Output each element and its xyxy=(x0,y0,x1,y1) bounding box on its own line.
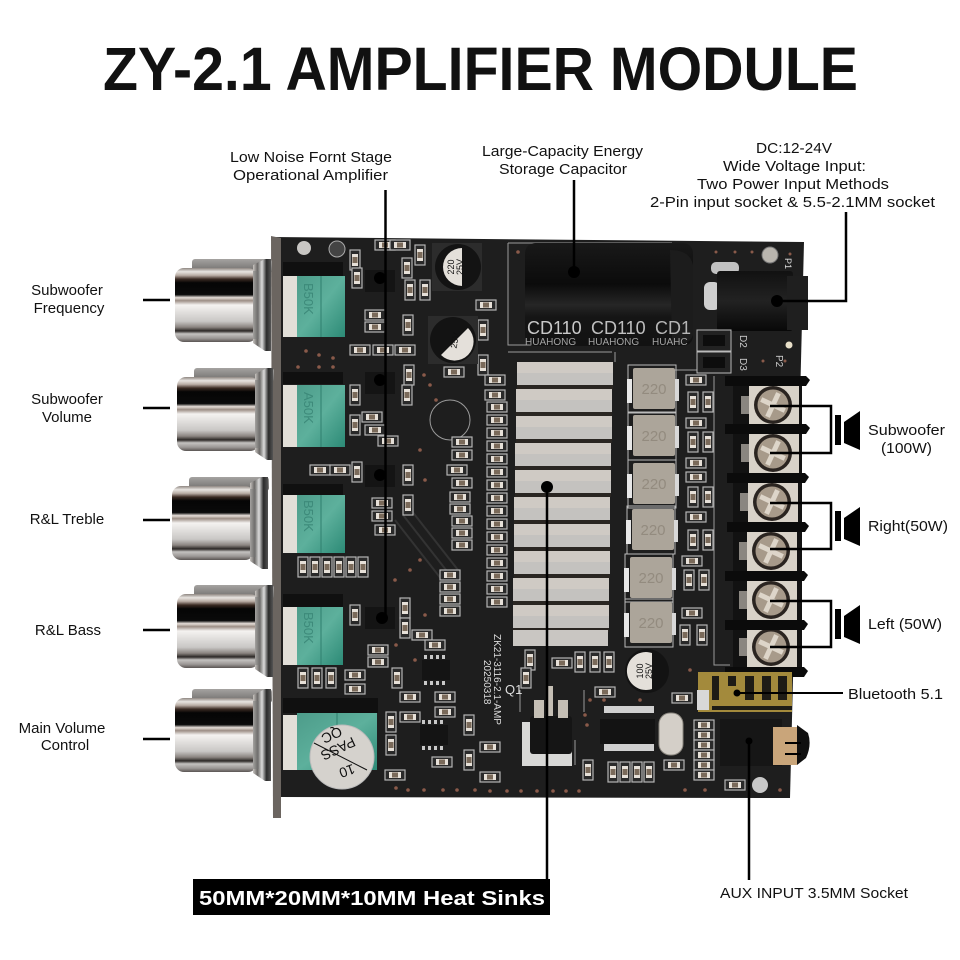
leader: op amp xyxy=(374,190,388,624)
leader: aux xyxy=(746,738,752,880)
diodes xyxy=(697,330,792,373)
pcb base xyxy=(272,237,804,798)
silkscreen outlines xyxy=(430,243,730,765)
label: subwoofer frequency: Frequency xyxy=(34,300,105,317)
smt electrolytic capacitors: 100 xyxy=(635,663,645,679)
label: bass: R&L Bass xyxy=(35,622,101,639)
leader: subwoofer frequency xyxy=(143,299,170,301)
smt electrolytic capacitors: 220 xyxy=(446,259,456,275)
label: treble: R&L Treble xyxy=(30,511,104,528)
aux 3.5mm jack xyxy=(720,719,810,766)
icon: speaker subwoofer xyxy=(835,411,860,450)
panel bracket xyxy=(271,236,281,818)
smt electrolytic capacitors xyxy=(428,243,669,693)
leader: heat sinks xyxy=(541,481,553,880)
board silkscreen text: ZK21-3116-2.1-AMP xyxy=(491,634,502,725)
panel: amplifier board xyxy=(172,236,810,818)
label: left 50w: Left (50W) xyxy=(868,616,942,633)
icon: speaker right xyxy=(835,507,860,546)
label: capacitor: Storage Capacitor xyxy=(499,161,627,178)
label: subwoofer volume: Subwoofer xyxy=(31,391,103,408)
diodes: D3 xyxy=(737,358,748,371)
label: capacitor: Large-Capacity Energy xyxy=(482,143,644,160)
label: op amp: Low Noise Fornt Stage xyxy=(230,149,392,166)
op-amp chips xyxy=(365,270,450,750)
large energy storage capacitor xyxy=(525,243,693,348)
leader: bluetooth xyxy=(734,690,843,696)
label: bluetooth: Bluetooth 5.1 xyxy=(848,686,943,703)
label: dc input: Two Power Input Methods xyxy=(697,176,889,193)
label: dc input: 2-Pin input socket & 5.5-2.1MM socket xyxy=(650,194,936,211)
mounting pads xyxy=(297,241,778,793)
label: op amp: Operational Amplifier xyxy=(233,167,388,184)
label: subwoofer 100w: (100W) xyxy=(881,440,932,457)
large energy storage capacitor: CD110 xyxy=(527,318,582,338)
smd components xyxy=(298,240,507,782)
knobs xyxy=(172,259,274,781)
qc pass sticker xyxy=(310,724,374,789)
large energy storage capacitor: HUAHONG xyxy=(525,337,576,348)
large energy storage capacitor: HUAHC xyxy=(652,337,688,348)
leader: subwoofer volume xyxy=(143,407,170,409)
bluetooth pcb antenna xyxy=(697,672,792,712)
smt electrolytic capacitors: 25V xyxy=(449,332,461,349)
potentiometers xyxy=(283,262,378,770)
smt electrolytic capacitors: 25V xyxy=(644,663,654,679)
large energy storage capacitor: CD110 xyxy=(591,318,646,338)
diodes: P2 xyxy=(773,355,784,368)
bracket: subwoofer xyxy=(770,406,831,453)
transistor, ic and crystal xyxy=(522,686,683,766)
qc pass sticker: 10 xyxy=(337,761,357,781)
panel: amplifier board: B50K xyxy=(301,612,316,644)
vias xyxy=(296,250,792,793)
label: dc input: Wide Voltage Input: xyxy=(723,158,866,175)
bracket: right xyxy=(770,503,831,549)
qc pass sticker: QC xyxy=(319,724,345,747)
dc power jack xyxy=(704,262,808,331)
label: main volume: Main Volume xyxy=(19,720,105,737)
bracket: left xyxy=(770,601,831,647)
label: subwoofer 100w: Subwoofer xyxy=(868,422,945,439)
board silkscreen text: 20250318 xyxy=(481,660,492,705)
title: ZY-2.1 AMPLIFIER MODULE xyxy=(103,35,858,103)
leader: main volume xyxy=(143,738,170,740)
qc pass sticker: PASS xyxy=(318,734,358,764)
leader: bass xyxy=(143,629,170,631)
board silkscreen text: P1 xyxy=(783,258,793,269)
screw terminal block xyxy=(725,376,810,677)
board silkscreen text xyxy=(481,258,793,725)
leader: treble xyxy=(143,519,170,521)
panel: amplifier board: B50K xyxy=(301,500,316,532)
panel: amplifier board: B50K xyxy=(301,283,316,315)
leader: capacitor xyxy=(568,180,580,278)
large energy storage capacitor: CD1 xyxy=(655,318,691,338)
smt electrolytic capacitors: 25V xyxy=(455,259,465,275)
icon: speaker left xyxy=(835,605,860,644)
panel: amplifier board: A50K xyxy=(301,392,316,424)
diagonal traces xyxy=(395,510,458,580)
label: right 50w: Right(50W) xyxy=(868,518,948,535)
diodes: D2 xyxy=(737,335,748,348)
board silkscreen text: Q1 xyxy=(505,682,522,697)
label: aux input: AUX INPUT 3.5MM Socket xyxy=(720,885,909,902)
label: dc input: DC:12-24V xyxy=(756,140,832,157)
label: subwoofer frequency: Subwoofer xyxy=(31,282,103,299)
leader: dc jack xyxy=(771,212,846,307)
inductors xyxy=(624,365,679,647)
label: subwoofer volume: Volume xyxy=(42,409,92,426)
label: main volume: Control xyxy=(41,737,89,754)
heat sink size banner: 50MM*20MM*10MM Heat Sinks xyxy=(199,888,545,910)
aluminium heat sinks xyxy=(513,362,613,646)
heat sink size banner xyxy=(193,879,550,915)
large energy storage capacitor: HUAHONG xyxy=(588,337,639,348)
